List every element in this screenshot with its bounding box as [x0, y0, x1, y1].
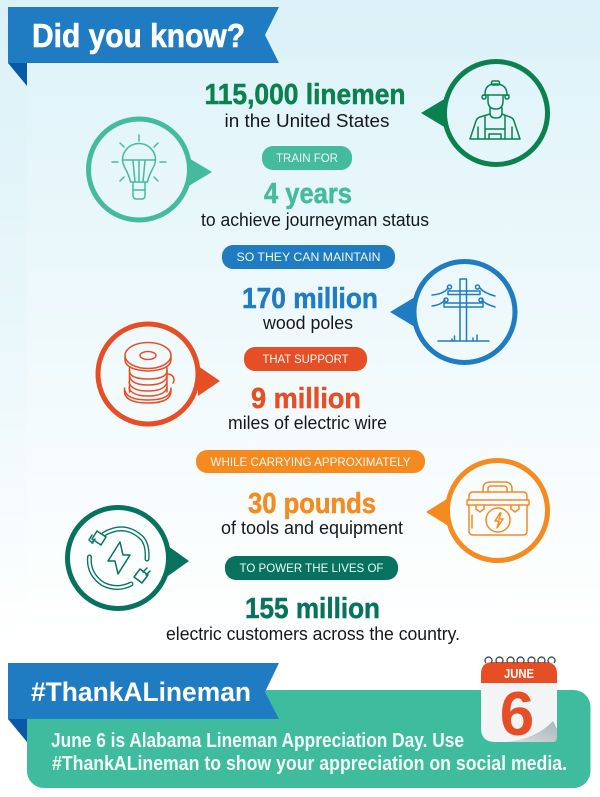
stat: 170 million: [242, 283, 378, 333]
stat: 4 years: to achieve journeyman status: [201, 210, 429, 230]
bottom message panel: [27, 690, 590, 788]
stat: 4 years: 4 years: [264, 178, 352, 210]
stat: 9 million: miles of electric wire: [228, 413, 387, 433]
hashtag: #ThankALineman: [31, 677, 251, 707]
pill: so they can maintain: SO THEY CAN MAINTAIN: [236, 252, 380, 264]
pill: train for: [262, 146, 352, 170]
stat: 9 million: [228, 383, 387, 433]
calendar icon: [481, 657, 557, 749]
icon: plugs and lightning: [68, 508, 189, 608]
pill: while carrying approximately: WHILE CARRYING APPROXIMATELY: [210, 457, 411, 469]
pill: to power the lives of: TO POWER THE LIVES OF: [240, 563, 384, 575]
pill: train for: TRAIN FOR: [276, 153, 338, 165]
stat: 30 pounds: [221, 488, 403, 538]
icon: utility pole: [390, 262, 515, 362]
stat: 9 million: 9 million: [251, 383, 361, 415]
stat: 170 million: 170 million: [242, 283, 378, 315]
calendar month: JUNE: [504, 667, 534, 681]
pill: while carrying approximately: [196, 450, 425, 473]
stat: 30 pounds: of tools and equipment: [221, 518, 403, 538]
stat: 155 million: electric customers across the country.: [166, 624, 460, 644]
stat: 115,000 linemen: in the United States: [224, 111, 390, 131]
message text: June 6 is Alabama Lineman Appreciation Day. Use: [51, 730, 464, 752]
icon: wire spool: [98, 324, 220, 424]
stat: 170 million: wood poles: [262, 313, 353, 333]
pill: so they can maintain: [222, 245, 395, 269]
pill: that support: [244, 347, 367, 371]
icon: lineman worker: [421, 62, 548, 164]
stat: 4 years: [201, 178, 429, 230]
title ribbon: [8, 7, 279, 86]
inner panel: [27, 63, 600, 663]
stat: 115,000 linemen: [204, 79, 406, 131]
stat: 115,000 linemen: 115,000 linemen: [204, 79, 406, 111]
icon: light bulb: [88, 119, 212, 220]
icon: toolbox: [426, 460, 548, 560]
stat: 155 million: 155 million: [245, 593, 380, 625]
stat: 155 million: [166, 593, 460, 644]
title: Did you know?: [32, 17, 245, 54]
pill: to power the lives of: [225, 556, 398, 580]
stat: 30 pounds: 30 pounds: [248, 488, 376, 520]
hashtag ribbon: [8, 663, 279, 742]
pill: that support: THAT SUPPORT: [262, 354, 348, 366]
calendar day: 6: [500, 680, 534, 749]
